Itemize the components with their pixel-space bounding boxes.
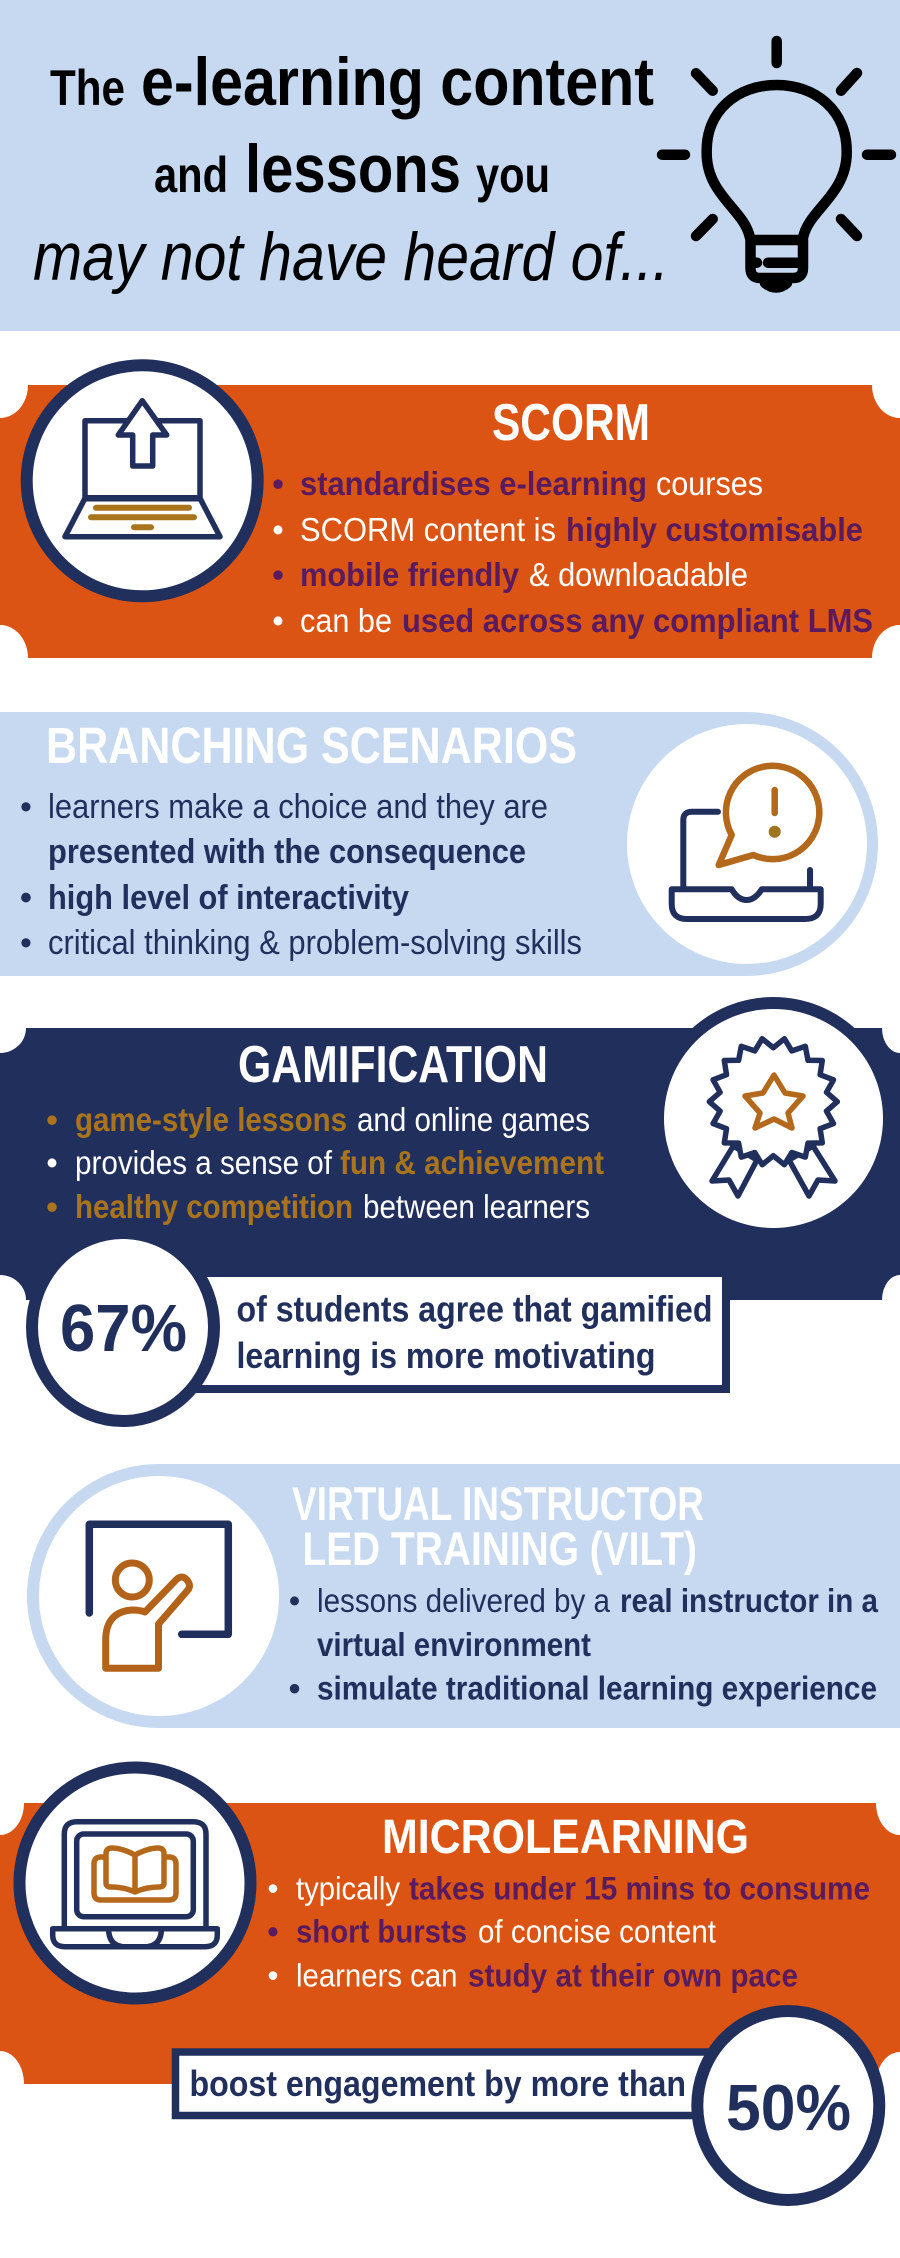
panel: gamification <box>0 997 900 1421</box>
text block: gamification bullets: • <box>46 1101 58 1138</box>
text block: SCORM bullets: SCORM content is <box>300 511 556 548</box>
panel: branching scenarios <box>0 712 878 976</box>
text block: gamification bullets: between learners <box>363 1188 590 1225</box>
text block: SCORM bullets: • <box>272 465 284 502</box>
heading: VILT: LED TRAINING (VILT) <box>302 1522 697 1575</box>
heading: SCORM: SCORM <box>492 394 650 452</box>
text block: branching bullets: learners make a choice and they are <box>48 788 548 826</box>
callout: 67% statistic: learning is more motivating <box>236 1335 656 1376</box>
text block: branching bullets: • <box>20 788 32 826</box>
panel: virtual instructor led training <box>27 1464 900 1728</box>
text block: gamification bullets: • <box>46 1188 58 1225</box>
text block: VILT bullets: lessons delivered by a <box>317 1582 611 1619</box>
text block: SCORM bullets: & downloadable <box>529 556 748 593</box>
text block: VILT bullets: • <box>289 1582 300 1619</box>
callout: 50% statistic: 50% <box>726 2071 851 2144</box>
text block: SCORM bullets: mobile friendly <box>300 556 520 593</box>
text block: SCORM bullets <box>272 465 873 639</box>
heading: microlearning: MICROLEARNING <box>382 1811 749 1864</box>
text block: branching bullets: high level of interactivity <box>48 879 409 917</box>
text block: microlearning bullets: learners can <box>296 1958 458 1994</box>
text block: gamification bullets <box>46 1101 604 1225</box>
text block: VILT bullets: real instructor in a <box>620 1582 879 1619</box>
text block: gamification bullets: game-style lessons <box>75 1101 347 1138</box>
callout: 50% statistic: boost engagement by more than <box>190 2063 686 2104</box>
icon: laptop upload <box>27 365 258 596</box>
callout: 50% statistic <box>176 2011 879 2200</box>
text block: VILT bullets: virtual environment <box>317 1626 591 1663</box>
callout: 67% statistic: of students agree that gamified <box>236 1288 712 1330</box>
text block: SCORM bullets: • <box>272 511 284 548</box>
text block: branching bullets <box>20 788 582 962</box>
text block: gamification bullets: • <box>46 1144 58 1181</box>
text block: microlearning bullets: typically <box>296 1870 400 1906</box>
title: The <box>50 60 125 116</box>
text block: SCORM bullets: • <box>272 602 284 639</box>
text block: microlearning bullets <box>267 1870 870 1994</box>
text block: gamification bullets: and online games <box>357 1101 590 1138</box>
panel: SCORM <box>0 365 900 658</box>
text block: VILT bullets <box>289 1582 879 1706</box>
text block: SCORM bullets: highly customisable <box>566 511 863 548</box>
text block: gamification bullets: provides a sense of <box>75 1144 333 1181</box>
icon: light bulb <box>662 41 891 288</box>
text block: SCORM bullets: can be <box>300 602 392 639</box>
icon: laptop with book <box>20 1768 250 1998</box>
text block: SCORM bullets: used across any compliant LMS <box>402 602 873 639</box>
text block: microlearning bullets: study at their own pace <box>468 1958 798 1994</box>
text block: microlearning bullets: • <box>267 1914 279 1950</box>
title <box>33 44 669 295</box>
title: e-learning content <box>141 44 654 120</box>
text block: SCORM bullets: courses <box>656 465 763 502</box>
text block: branching bullets: • <box>20 879 32 917</box>
text block: microlearning bullets: • <box>267 1958 279 1994</box>
title: you <box>476 147 550 203</box>
title: lessons <box>245 131 461 207</box>
heading: VILT: VIRTUAL INSTRUCTOR <box>292 1477 704 1530</box>
heading: branching scenarios: BRANCHING SCENARIOS <box>46 717 577 774</box>
text block: SCORM bullets: • <box>272 556 284 593</box>
text block: branching bullets: • <box>20 924 32 962</box>
callout: 67% statistic: 67% <box>60 1291 187 1366</box>
text block: microlearning bullets: short bursts <box>296 1914 467 1950</box>
heading: VILT <box>292 1477 704 1575</box>
panel: header <box>0 0 900 331</box>
panel: microlearning <box>0 1768 900 2200</box>
text block: gamification bullets: healthy competition <box>75 1188 353 1225</box>
icon: award rosette <box>652 997 895 1240</box>
text block: branching bullets: presented with the consequence <box>48 833 526 871</box>
text block: microlearning bullets: takes under 15 mins to consume <box>409 1870 870 1906</box>
icon: instructor at board <box>39 1476 279 1716</box>
icon: laptop with alert bubble <box>627 724 867 964</box>
title: and <box>154 147 228 203</box>
text block: microlearning bullets: • <box>267 1870 279 1906</box>
text block: SCORM bullets: standardises e-learning <box>300 465 647 502</box>
text block: branching bullets: critical thinking & problem-solving skills <box>48 924 582 962</box>
heading: gamification: GAMIFICATION <box>238 1036 548 1094</box>
title: may not have heard of... <box>33 219 669 295</box>
text block: gamification bullets: fun & achievement <box>340 1144 604 1181</box>
text block: microlearning bullets: of concise content <box>478 1914 716 1950</box>
text block: VILT bullets: • <box>289 1670 300 1706</box>
callout: 67% statistic <box>32 1233 730 1421</box>
